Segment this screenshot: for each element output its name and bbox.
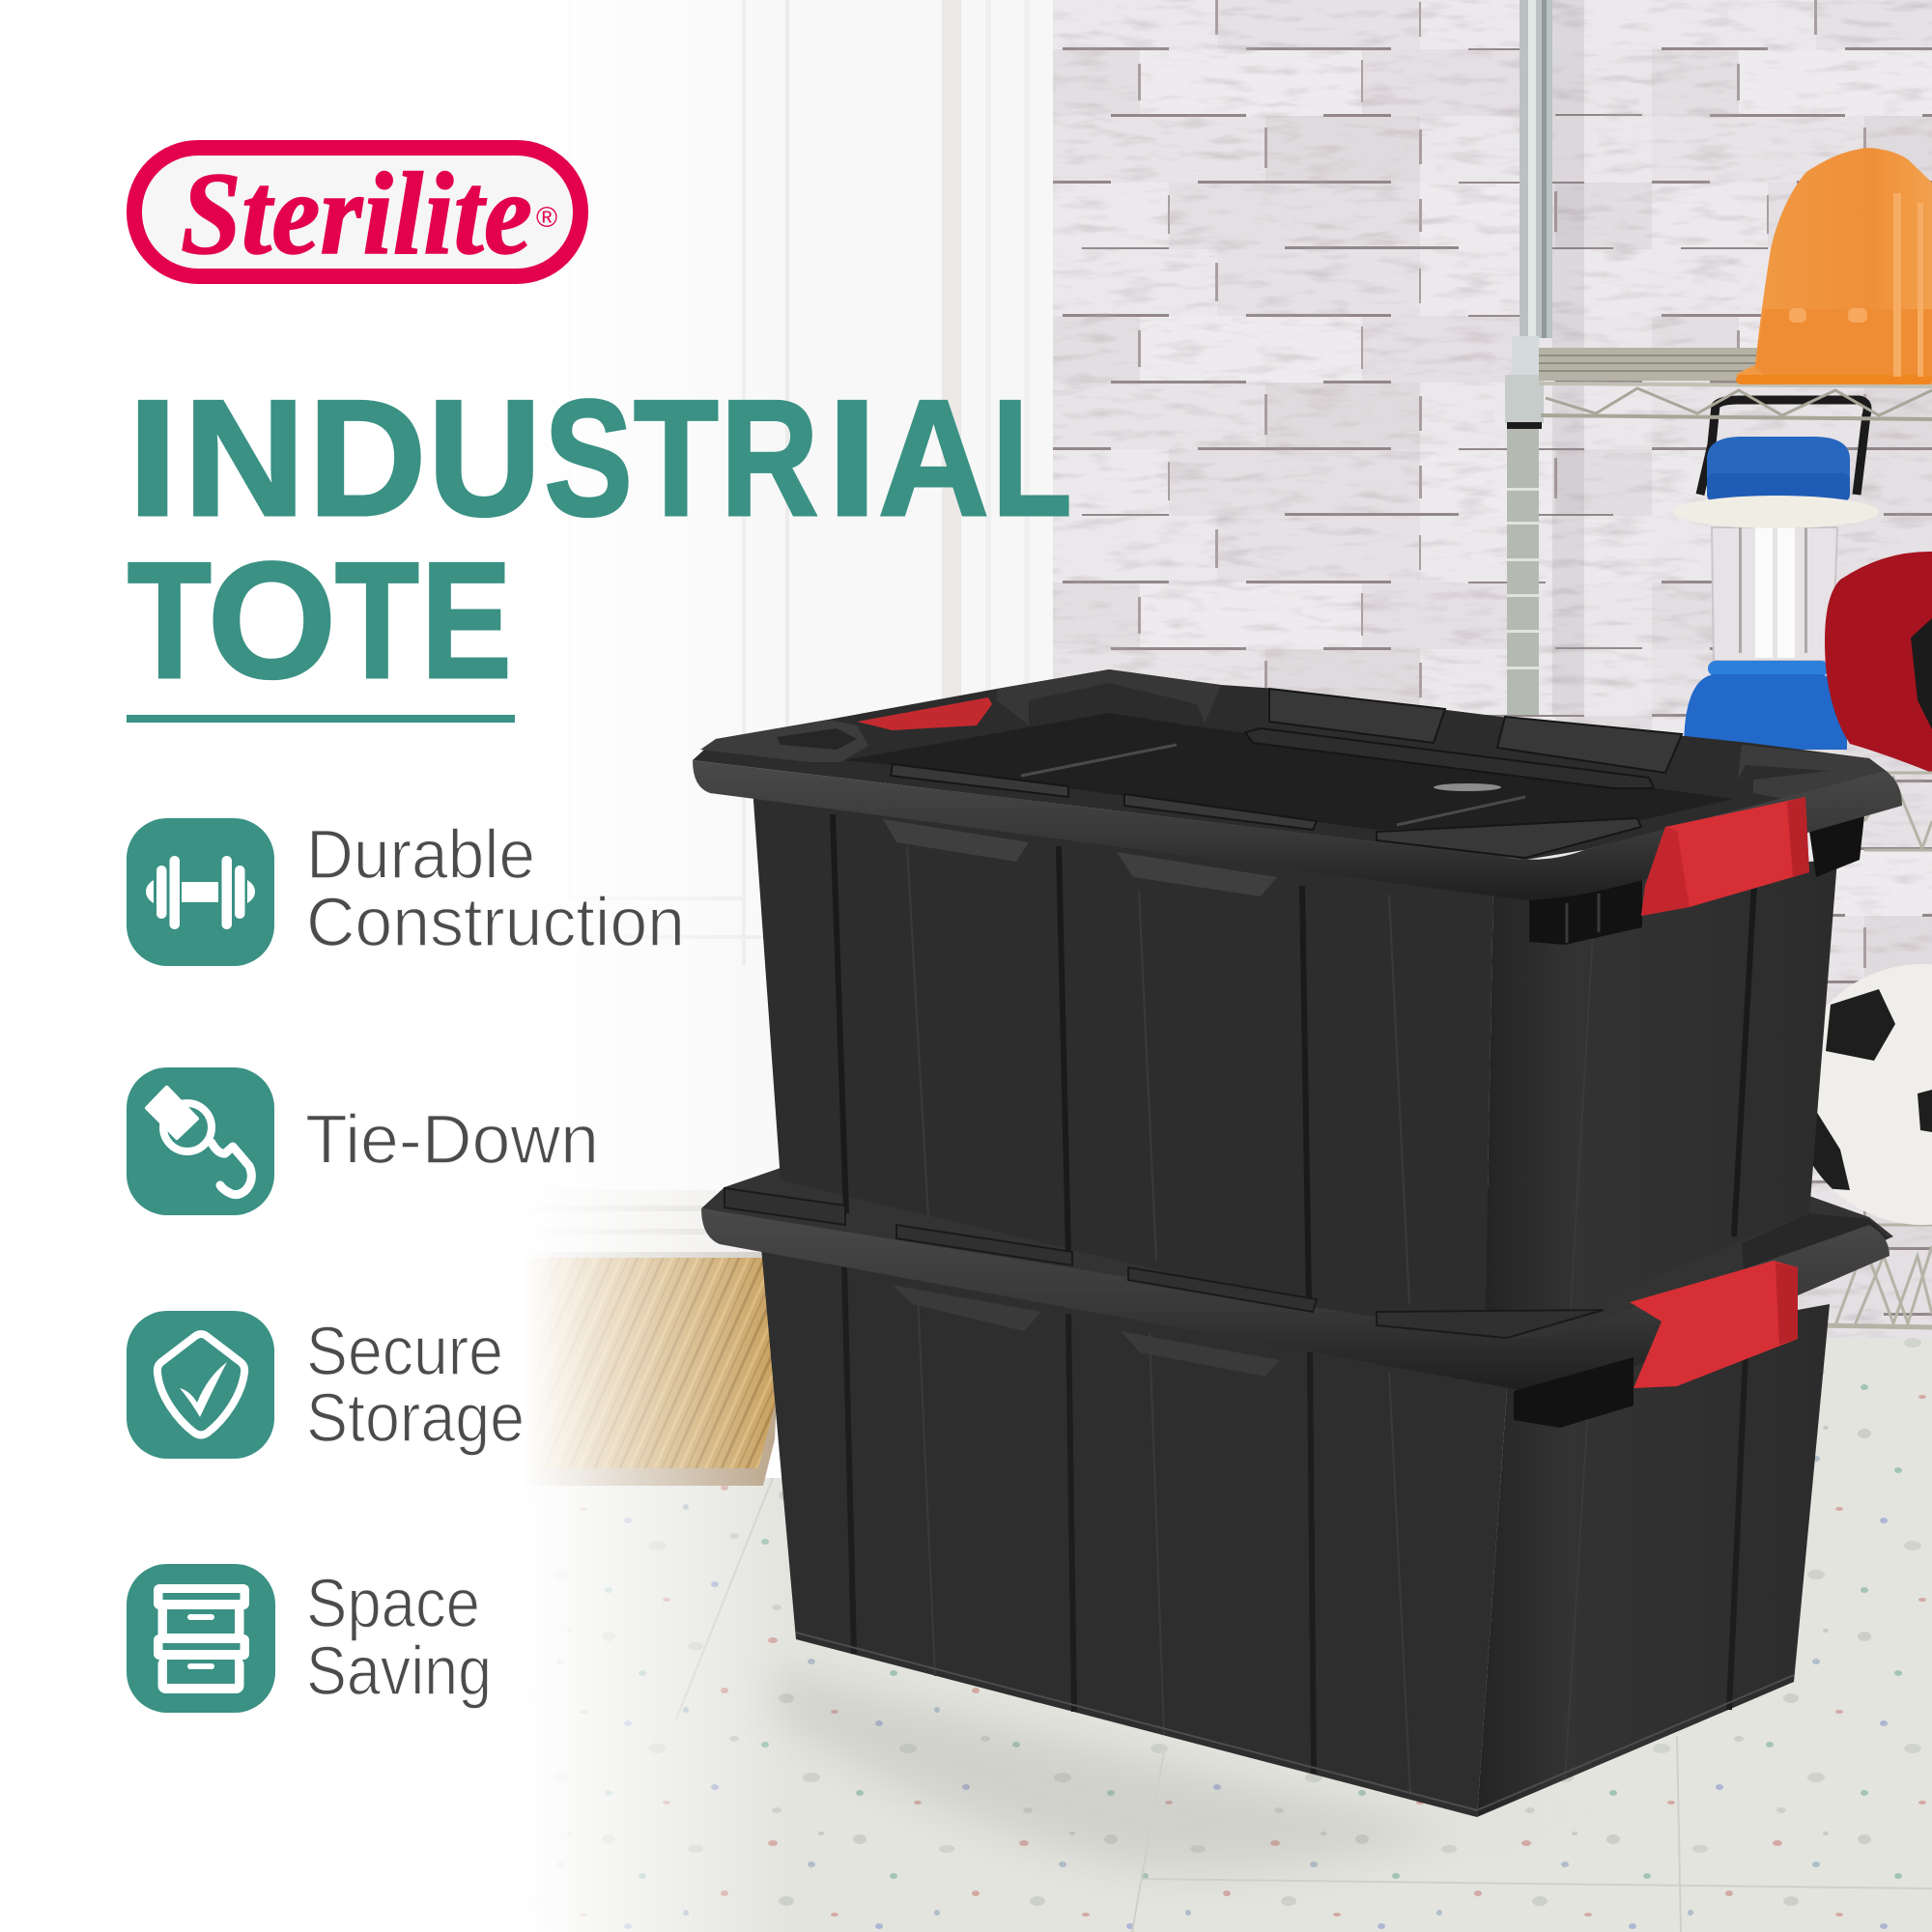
lid logo badge: [1434, 783, 1501, 791]
title line one: I: [827, 366, 877, 551]
logo wordmark: Sterilite: [181, 149, 532, 279]
doormat rug: [386, 1258, 787, 1486]
back red latch: [857, 697, 992, 730]
feature: durable construction: [127, 817, 685, 966]
feature: space saving: [127, 1564, 492, 1713]
title line one: T: [634, 366, 719, 551]
label text: Tie-Down: [305, 1102, 599, 1179]
lid deck highlights: [1021, 745, 1525, 825]
upper lid front band: [693, 760, 1902, 900]
door trim: [942, 0, 1053, 1198]
registered mark: ®: [536, 202, 557, 234]
upper tote body: [753, 787, 1837, 1348]
title line one: L: [992, 366, 1072, 551]
lower lid front band: [701, 1208, 1889, 1391]
lower lid right corner: [1742, 1213, 1889, 1277]
label text: [306, 817, 685, 961]
label text: Secure: [306, 1314, 503, 1390]
lower underside tabs: [892, 1285, 1041, 1331]
upper wire shelf: [1539, 348, 1932, 419]
background photo scene: [534, 0, 1932, 1932]
icon: stacked boxes: [127, 1564, 275, 1713]
back left corner rim: [700, 720, 868, 762]
door moulding: [570, 0, 966, 1188]
right corner rim: [1738, 745, 1886, 802]
title line two: T: [335, 529, 419, 713]
label text: Saving: [306, 1634, 492, 1710]
floor: [386, 1338, 1932, 1932]
title line two: T: [128, 529, 212, 713]
raised lid bars: [891, 689, 1682, 858]
icon: dumbbell: [127, 818, 274, 966]
upper red latch: [1641, 797, 1809, 916]
lid inner deck: [844, 713, 1734, 830]
icon: shield check: [127, 1311, 274, 1459]
underside tabs: [883, 819, 1029, 862]
lantern handle: [1700, 400, 1867, 495]
lower tote body: [760, 1236, 1830, 1817]
label text: Storage: [306, 1380, 525, 1457]
baseboard: [386, 1190, 1063, 1258]
title line one: R: [721, 366, 818, 551]
camping lantern: [1674, 437, 1879, 750]
side wire shelves: [1816, 773, 1932, 1327]
title underline: [127, 715, 515, 723]
brick wall: [1053, 0, 1932, 1352]
title line one: S: [545, 365, 633, 550]
upper tote: [693, 669, 1902, 1348]
title line two: O: [208, 528, 336, 713]
title: Industrial Tote: [128, 365, 1072, 713]
back centre rim: [997, 669, 1221, 725]
left white fade: [0, 0, 792, 1932]
soccer ball: [1812, 964, 1932, 1225]
label text: Durable: [306, 817, 535, 894]
orange hard hat: [1736, 148, 1932, 384]
lower lid top: [701, 1168, 1893, 1352]
title line one: A: [878, 366, 989, 550]
lower lid front: [701, 1188, 1889, 1428]
brand logo: Sterilite: [134, 148, 581, 279]
lower corner ribs: [1514, 1357, 1634, 1428]
lower lid bars: [724, 1188, 1604, 1338]
red cap: [1825, 552, 1932, 773]
lower red latch: [1630, 1261, 1798, 1388]
brick wall scuffing: [1053, 0, 1932, 1352]
feature: secure storage: [127, 1311, 525, 1459]
corner ribs: [1529, 807, 1865, 945]
title line two: E: [421, 528, 512, 713]
title line one: N: [184, 366, 305, 551]
metal shelf pole: [1505, 0, 1584, 715]
title line one: U: [428, 366, 541, 551]
label text: Construction: [306, 885, 685, 961]
label text: Space: [306, 1566, 480, 1642]
lower tote: [701, 1168, 1893, 1817]
door and wall panel: [0, 0, 966, 1198]
feature: tie-down: [127, 1067, 599, 1215]
title line one: [128, 365, 1072, 551]
icon: strap hook: [127, 1067, 274, 1215]
title line two: [128, 528, 512, 713]
upper lid top surface: [693, 669, 1889, 860]
label text: [306, 1314, 525, 1457]
title line one: D: [308, 366, 426, 551]
label text: [306, 1566, 492, 1710]
title line one: I: [128, 366, 178, 551]
